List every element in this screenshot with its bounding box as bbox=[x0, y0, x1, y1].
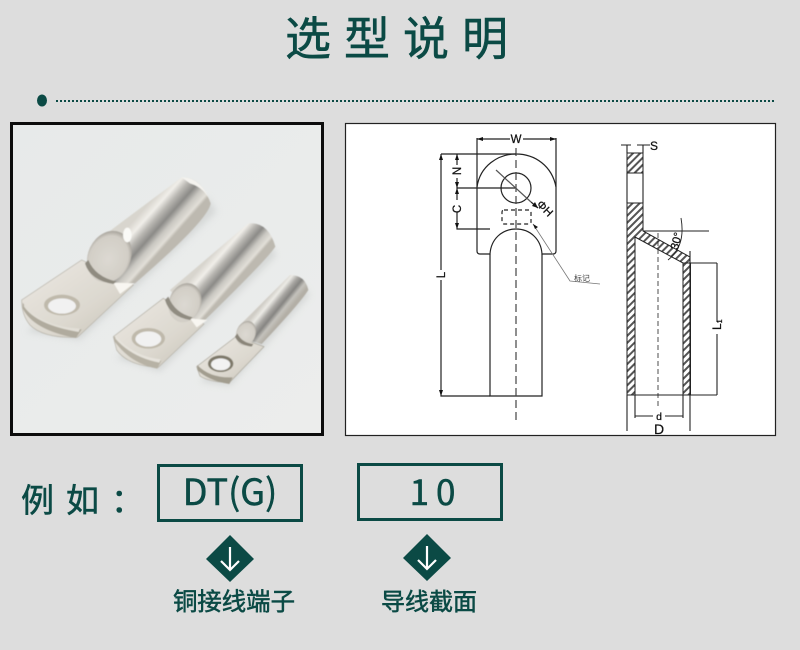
dimension labels: front view: ΦH bbox=[534, 199, 555, 219]
dotted divider with bullet bbox=[37, 94, 776, 106]
dimension labels: front view: 标记 bbox=[574, 273, 590, 283]
panel: technical drawing bbox=[346, 124, 776, 437]
dimension labels: section view bbox=[650, 139, 724, 437]
large lug bbox=[22, 177, 211, 338]
dimension labels: front view: W bbox=[511, 134, 522, 146]
medium lug bbox=[113, 223, 275, 369]
dimension labels: section view: S bbox=[650, 139, 658, 153]
dimension labels: front view: C bbox=[452, 205, 464, 213]
example label: 例如： bbox=[21, 482, 156, 519]
label: copper terminal: 铜接线端子 bbox=[173, 589, 295, 616]
size box: 10 bbox=[358, 464, 502, 520]
panel: product photo of three copper lugs bbox=[12, 124, 322, 434]
dimension labels: front view bbox=[436, 134, 590, 283]
dimension labels: section view: D bbox=[654, 421, 664, 437]
dimension labels: front view: L bbox=[436, 271, 448, 278]
icon: down arrow diamond 1 bbox=[206, 535, 254, 582]
dimension labels: front view: N bbox=[452, 167, 464, 175]
model code box: DT(G): DT(G) bbox=[183, 464, 277, 516]
size box: 10: 10 bbox=[410, 465, 462, 516]
model code box: DT(G) bbox=[158, 464, 302, 520]
icon: down arrow diamond 2 bbox=[403, 534, 451, 581]
small lug bbox=[197, 275, 308, 384]
dimension labels: section view: d bbox=[656, 411, 662, 423]
dimension labels: section view: 30° bbox=[669, 231, 685, 251]
dimension labels: section view: L₁ bbox=[710, 319, 724, 330]
title: 选型说明 bbox=[285, 13, 521, 65]
arrowheads: front view bbox=[439, 137, 556, 396]
label: wire cross-section: 导线截面 bbox=[381, 589, 477, 616]
drawing: front view of lug bbox=[441, 138, 600, 421]
drawing: section view of lug bbox=[621, 145, 717, 431]
